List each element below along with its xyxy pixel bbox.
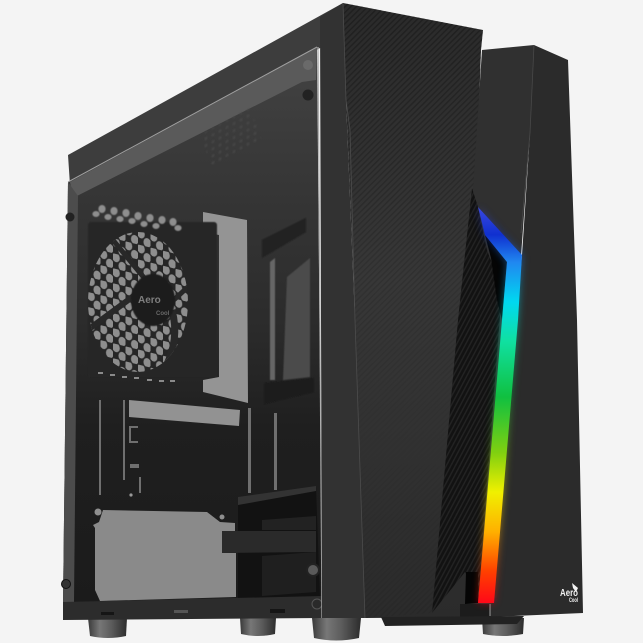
thumbscrew: right lower — [307, 564, 319, 576]
main front face — [343, 3, 500, 618]
fan frame — [88, 222, 217, 377]
thumbscrew: right second — [302, 90, 314, 100]
panel: right front face — [432, 45, 583, 618]
horizontal slot — [129, 400, 240, 426]
top vent mesh — [200, 108, 262, 168]
AeroCool logo: Cool — [569, 598, 578, 604]
expansion slots and standoffs — [99, 400, 277, 497]
mounting holes — [94, 508, 224, 520]
panel: front bezel with carbon texture — [320, 3, 500, 618]
inner right fold panel — [262, 218, 314, 404]
bottom frame — [63, 596, 322, 620]
RGB light strip — [478, 207, 522, 603]
glass interior — [63, 47, 322, 604]
light strip — [478, 207, 522, 603]
thumbscrew: right bottom — [312, 599, 322, 609]
AeroCool logo: Aero — [560, 588, 578, 599]
small holes row under fan — [98, 372, 175, 382]
thumbscrews — [62, 60, 322, 609]
foot: front left — [312, 618, 361, 640]
honeycomb holes — [88, 232, 188, 372]
facet crease — [521, 45, 534, 233]
hard drive cage (light shape) — [93, 510, 236, 601]
glass edge highlights — [68, 47, 317, 182]
shadow beside light strip — [485, 235, 507, 320]
shadow at light strip base — [465, 572, 478, 604]
bottom block under LED — [460, 604, 490, 617]
top strip of case — [68, 3, 345, 185]
thumbscrew: right top — [303, 60, 313, 70]
fan grille: Cool — [156, 311, 170, 317]
tray cutout bracket — [203, 212, 248, 403]
upper glass frame band — [70, 47, 317, 198]
fan hub — [131, 274, 175, 326]
fan spokes — [90, 240, 186, 362]
PSU shroud — [238, 487, 320, 598]
thumbscrew: left upper — [66, 212, 74, 222]
dark recess with texture — [432, 188, 502, 613]
foot: rear left — [88, 618, 127, 638]
fan logo: Aero — [138, 295, 161, 306]
right front outer facet — [490, 45, 583, 617]
fold line — [343, 3, 365, 618]
thumbscrew: left lower — [62, 580, 70, 588]
fan grille — [85, 232, 190, 372]
light strip glow — [478, 207, 522, 603]
AeroCool logo — [560, 583, 578, 604]
carbon pattern — [344, 3, 483, 265]
top hole rows — [92, 205, 182, 231]
bevel between side and front — [320, 3, 365, 618]
right front inner facet — [470, 45, 534, 618]
panel: side with tempered glass — [62, 3, 345, 620]
feet — [88, 618, 524, 640]
foot: rear right — [240, 618, 276, 636]
plinth under front — [381, 616, 524, 626]
bottom frame slots — [101, 609, 285, 615]
left frame strip — [63, 182, 78, 604]
foot: front right — [482, 618, 524, 636]
